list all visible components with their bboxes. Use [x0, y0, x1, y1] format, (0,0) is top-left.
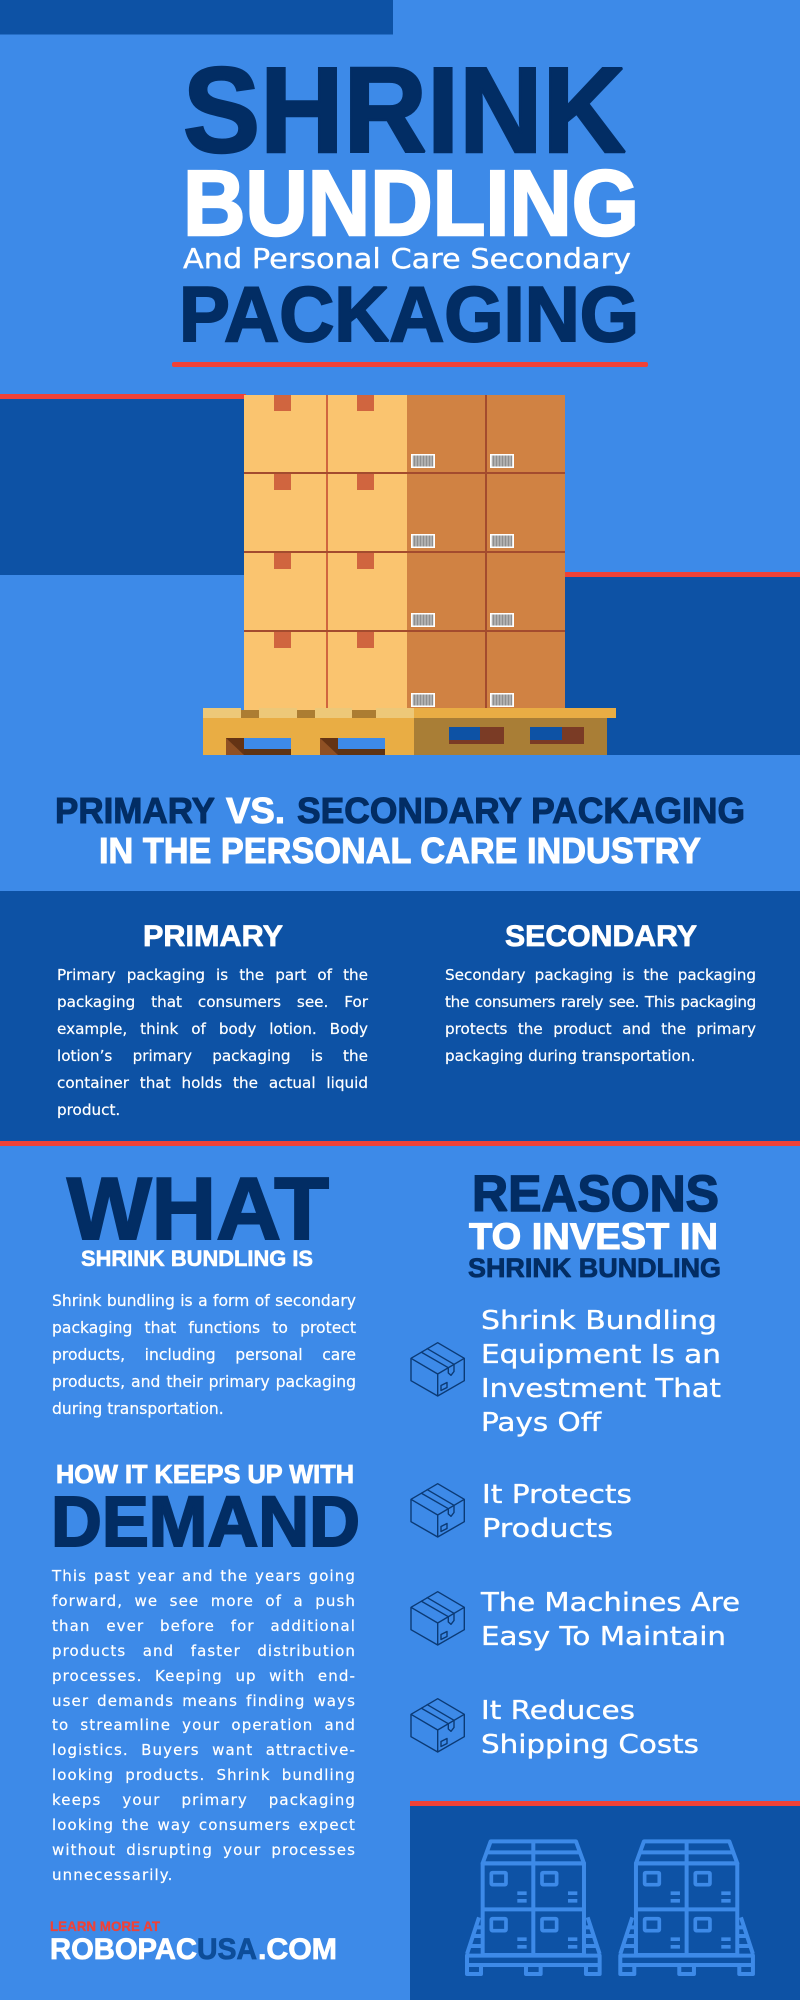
learn more at: LEARN MORE AT — [50, 1918, 160, 1934]
panel: primary and secondary — [0, 891, 800, 1146]
reason text: It Protects — [482, 1480, 632, 1510]
reason 4 — [411, 1696, 699, 1760]
text block: what shrink bundling is: during transportation. — [52, 1400, 224, 1418]
heading: primary: PRIMARY — [143, 920, 283, 953]
text block: what shrink bundling is: products, and their primary packaging — [52, 1373, 356, 1391]
heading: reasons to invest: SHRINK BUNDLING — [468, 1253, 721, 1283]
website — [50, 1933, 337, 1966]
title line: subtitle: And Personal Care Secondary — [183, 242, 631, 275]
reason text: Shrink Bundling — [481, 1306, 717, 1336]
illustration: stacked boxes on pallet — [203, 395, 616, 755]
text block: demand description — [52, 1567, 356, 1884]
text block: demand description: looking the way consumers expect — [52, 1816, 356, 1834]
text block: secondary description — [445, 966, 756, 1065]
title underline — [172, 362, 648, 367]
reason text: Equipment Is an — [481, 1340, 721, 1370]
text block: demand description: keeps your primary packaging — [52, 1791, 356, 1809]
title line: SHRINK: SHRINK — [183, 42, 626, 178]
text block: what shrink bundling is: Shrink bundling is a form of secondary — [52, 1292, 356, 1310]
icon: pallet stack 1 — [467, 1841, 600, 1974]
text block: what shrink bundling is — [52, 1292, 356, 1418]
icon: box — [411, 1343, 464, 1396]
text block: secondary description: the consumers rarely see. This packaging — [445, 993, 756, 1011]
text block: demand description: user demands means finding ways — [52, 1692, 356, 1710]
text block: what shrink bundling is: products, including personal care — [52, 1346, 356, 1364]
left dark panel — [0, 394, 246, 575]
text block: primary description: example, think of body lotion. Body — [57, 1020, 368, 1038]
heading: reasons to invest: TO INVEST IN — [469, 1216, 718, 1257]
heading: reasons to invest — [468, 1165, 721, 1283]
icon: box — [411, 1699, 464, 1752]
reason text: The Machines Are — [480, 1588, 740, 1618]
heading: how it keeps up with demand: HOW IT KEEPS UP WITH — [56, 1459, 354, 1489]
icon: pallet stack 2 — [620, 1841, 753, 1974]
text block: primary description: Primary packaging is the part of the — [57, 966, 368, 984]
text block: primary description: container that holds the actual liquid — [57, 1074, 368, 1092]
stack of boxes — [244, 395, 565, 710]
text block: primary description: product. — [57, 1101, 120, 1119]
top dark bar — [0, 0, 393, 34]
section heading: primary vs. secondary: IN THE PERSONAL CARE INDUSTRY — [99, 830, 701, 871]
heading: what shrink bundling is: SHRINK BUNDLING IS — [81, 1246, 313, 1271]
heading: what shrink bundling is: WHAT — [67, 1159, 329, 1258]
text block: demand description: products and faster distribution — [52, 1642, 356, 1660]
panel: bottom right with pallet icons — [410, 1801, 800, 2000]
text block: demand description: without disrupting your processes — [52, 1841, 356, 1859]
section heading: primary vs. secondary: SECONDARY PACKAGING — [297, 790, 745, 831]
section heading: primary vs. secondary — [55, 790, 745, 871]
reason text: Shipping Costs — [481, 1730, 699, 1760]
heading: secondary: SECONDARY — [505, 920, 697, 953]
website: .COM — [258, 1933, 337, 1966]
heading: reasons to invest: REASONS — [472, 1165, 719, 1222]
website: ROBOPAC — [50, 1933, 197, 1966]
icon: box — [411, 1592, 464, 1645]
reason 1 — [411, 1306, 721, 1438]
text block: demand description: unnecessarily. — [52, 1866, 173, 1884]
text block: secondary description: Secondary packaging is the packaging — [445, 966, 756, 984]
website: USA — [197, 1933, 257, 1966]
icon: box — [411, 1484, 464, 1537]
title line: PACKAGING: PACKAGING — [179, 270, 639, 358]
reason text: Products — [482, 1514, 613, 1544]
text block: secondary description: protects the product and the primary — [445, 1020, 756, 1038]
reason text: It Reduces — [481, 1696, 635, 1726]
text block: what shrink bundling is: packaging that functions to protect — [52, 1319, 356, 1337]
text block: primary description — [57, 966, 368, 1119]
text block: demand description: looking products. Shrink bundling — [52, 1766, 356, 1784]
title — [179, 42, 639, 358]
section heading: primary vs. secondary: PRIMARY — [55, 790, 215, 831]
reason 2 — [411, 1480, 632, 1544]
text block: demand description: to streamline your operation and — [52, 1716, 356, 1734]
text block: primary description: packaging that consumers see. For — [57, 993, 368, 1011]
heading: how it keeps up with demand: DEMAND — [51, 1483, 360, 1562]
text block: demand description: than ever before for additional — [52, 1617, 356, 1635]
reason 3 — [411, 1588, 740, 1652]
right dark panel — [565, 572, 800, 755]
text block: demand description: processes. Keeping up with end- — [52, 1667, 356, 1685]
reason text: Investment That — [481, 1374, 721, 1404]
text block: primary description: lotion’s primary packaging is the — [57, 1047, 368, 1065]
text block: demand description: forward, we see more of a push — [52, 1592, 356, 1610]
reason text: Pays Off — [481, 1408, 602, 1438]
text block: demand description: logistics. Buyers want attractive- — [52, 1741, 356, 1759]
text block: secondary description: packaging during transportation. — [445, 1047, 695, 1065]
pallet — [203, 708, 616, 755]
section heading: primary vs. secondary: VS. — [226, 790, 285, 831]
reason text: Easy To Maintain — [481, 1622, 726, 1652]
call to action — [50, 1918, 337, 1966]
text block: demand description: This past year and the years going — [52, 1567, 356, 1585]
title line: BUNDLING: BUNDLING — [183, 151, 639, 255]
